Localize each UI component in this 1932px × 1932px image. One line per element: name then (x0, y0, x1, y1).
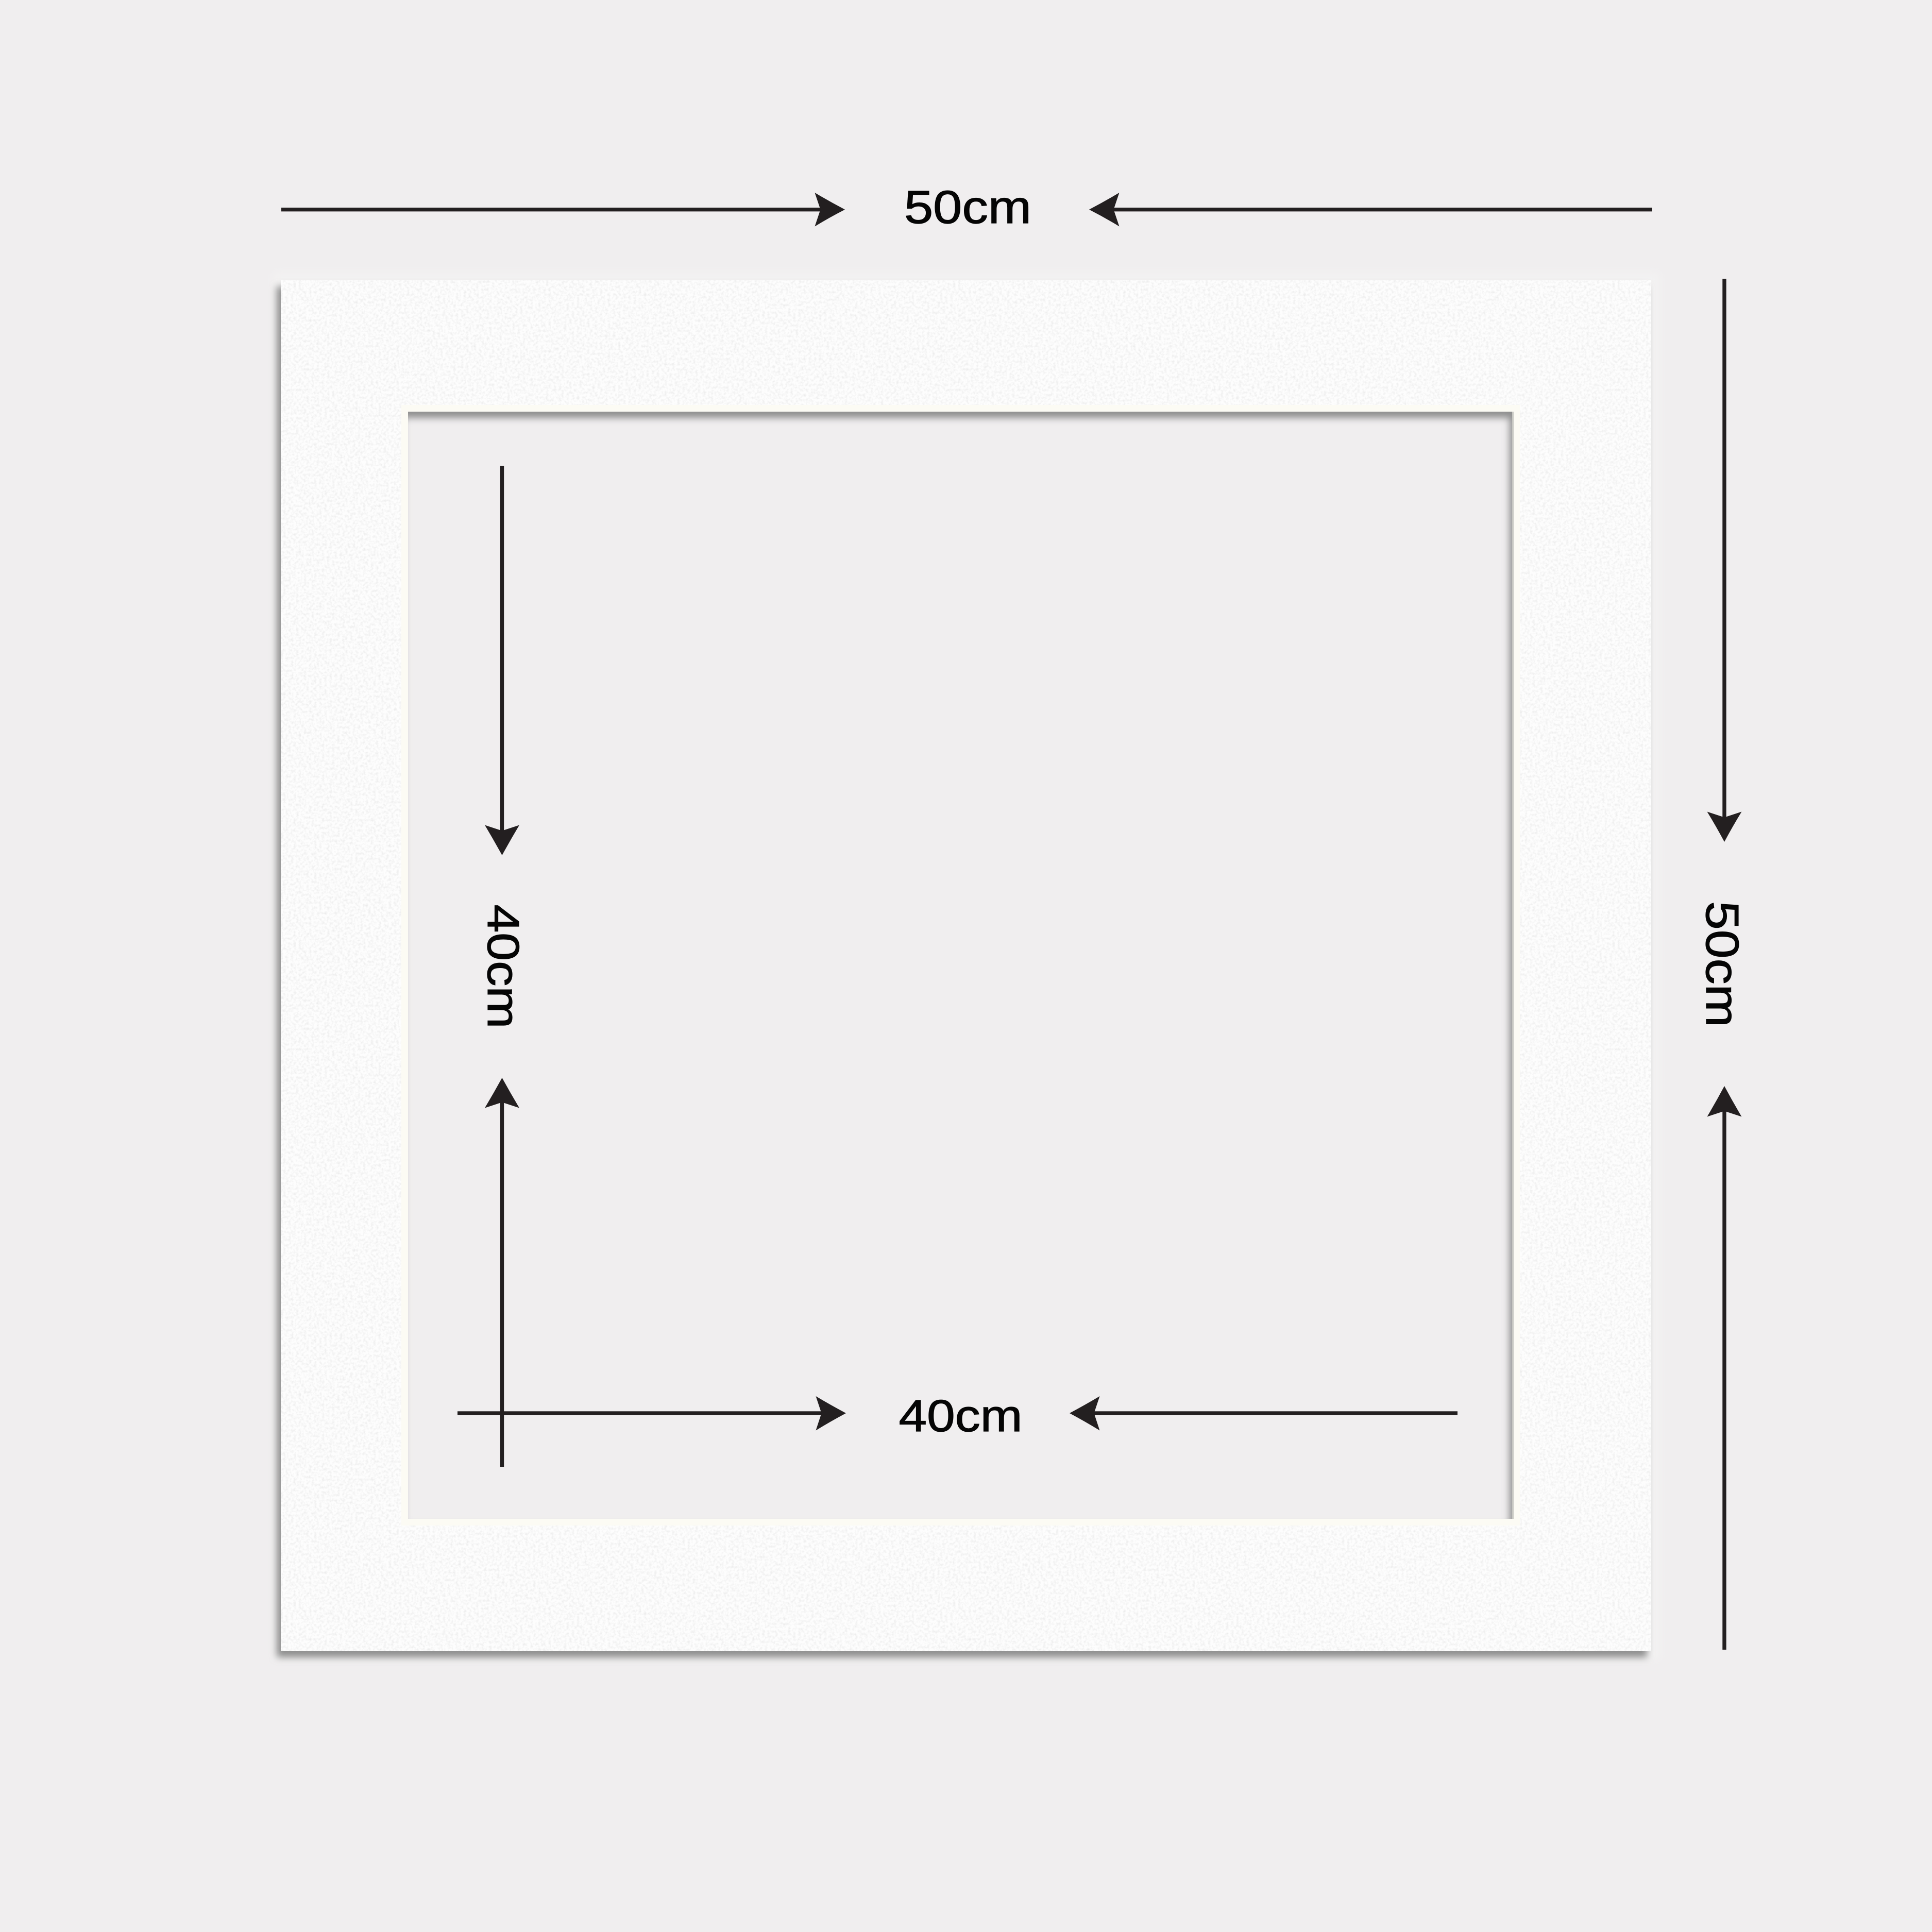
mat halo (273, 272, 1660, 1660)
arrow: right height, lower (1707, 1086, 1741, 1650)
panel: white mat board (281, 280, 1651, 1651)
arrow: top width, right (1089, 193, 1652, 227)
arrow: inner width, left (457, 1396, 846, 1430)
arrow: inner height, lower (485, 1078, 519, 1467)
label: inner width 40cm: 40cm (899, 1391, 1022, 1441)
label: inner height 40cm: 40cm (478, 905, 528, 1028)
label: right height 50cm: 50cm (1696, 901, 1748, 1027)
arrow: inner width, right (1070, 1396, 1458, 1430)
mat drop shadow (277, 286, 1647, 1657)
arrow: right height, upper (1707, 279, 1741, 842)
cream inner bevel (401, 405, 1520, 1526)
arrow: top width, left (281, 193, 845, 227)
mat board surface (281, 280, 1651, 1651)
label: top width 50cm: 50cm (904, 182, 1031, 233)
arrow: inner height, upper (485, 466, 519, 855)
